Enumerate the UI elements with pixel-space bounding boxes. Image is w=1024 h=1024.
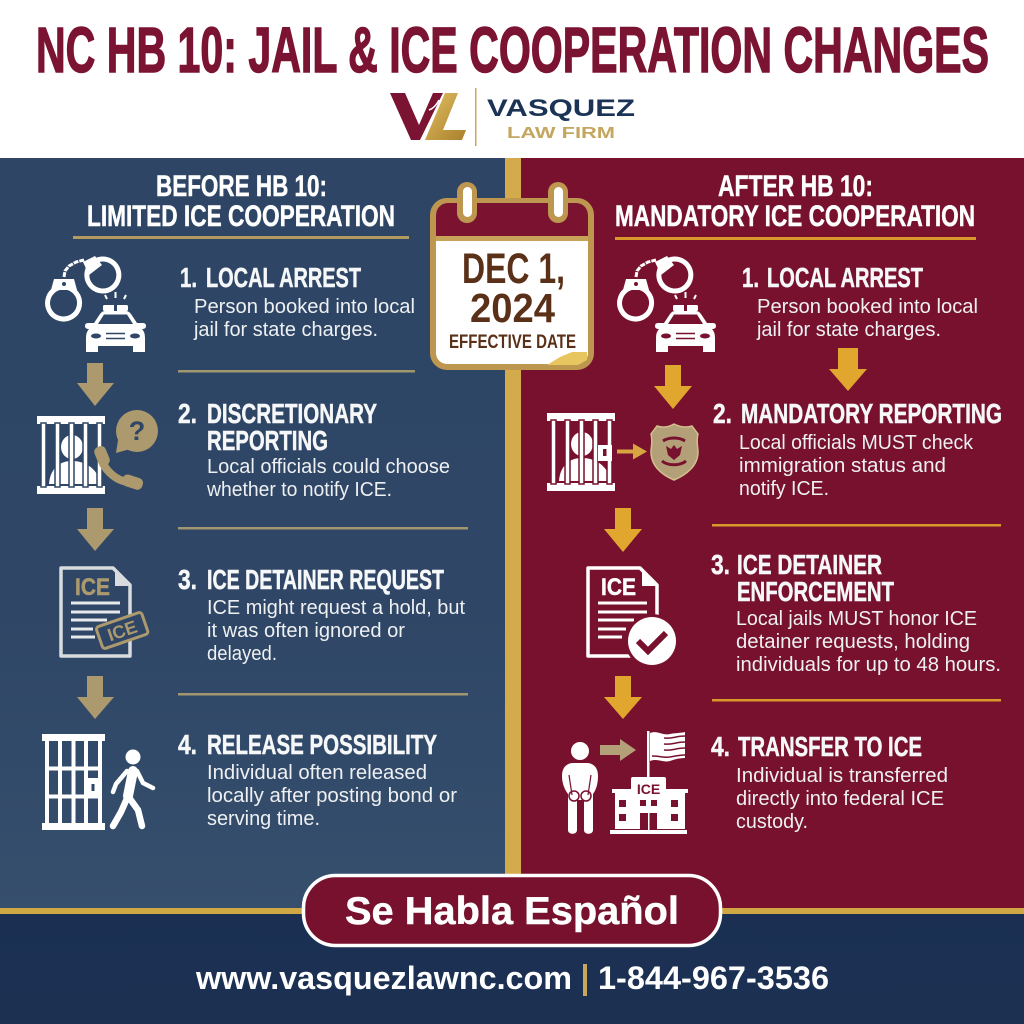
icon: jail and phone question (37, 410, 158, 494)
contact line: www.vasquezlawnc.com (195, 960, 572, 996)
step 3: ICE detainer request: ICE might request a hold, but (207, 597, 465, 619)
step 3: ICE detainer request (178, 564, 465, 665)
icon: ICE document with stamp: ICE (75, 574, 110, 601)
step 4: release possibility: RELEASE POSSIBILITY (207, 729, 437, 760)
before heading (73, 170, 409, 239)
step 2: discretionary reporting: REPORTING (207, 425, 328, 456)
step 1: local arrest: LOCAL ARREST (206, 262, 361, 293)
icon: ICE document with stamp: ICE (105, 617, 140, 645)
after heading: AFTER HB 10: (718, 170, 873, 203)
logo: Vasquez Law Firm (390, 88, 635, 146)
step 4: transfer to ICE: custody. (736, 811, 808, 833)
arrow (604, 508, 642, 552)
panel: before HB 10 (0, 158, 506, 910)
calendar: effective date: 2024 (470, 285, 555, 331)
step 2: mandatory reporting (713, 398, 1002, 500)
icon: jail door and walking person (42, 734, 153, 830)
icon: ICE document with stamp (61, 568, 149, 656)
step 2: discretionary reporting: 2. (178, 398, 197, 429)
center gold divider (505, 158, 521, 910)
icon: ICE document with check: ICE (601, 574, 636, 601)
step 1: local arrest: Person booked into local (757, 296, 978, 318)
step 4: transfer to ICE (711, 731, 948, 833)
arrow (604, 676, 642, 719)
step 1: local arrest: Person booked into local (194, 296, 415, 318)
icon: person transferred to ICE building: ICE (637, 781, 660, 797)
calendar: effective date: EFFECTIVE DATE (449, 331, 576, 353)
step 3: ICE detainer enforcement: ENFORCEMENT (737, 576, 894, 607)
step 4: release possibility: serving time. (207, 808, 320, 830)
icon: handcuffs and police car (48, 256, 146, 352)
contact line: 1-844-967-3536 (598, 960, 829, 996)
step 3: ICE detainer enforcement: Local jails MUST honor ICE (736, 608, 977, 630)
step 2: mandatory reporting: notify ICE. (739, 478, 829, 500)
step 3: ICE detainer request: ICE DETAINER REQUEST (207, 564, 444, 595)
step 1: local arrest: 1. (742, 262, 759, 293)
calendar: effective date: DEC 1, (462, 245, 565, 293)
step 2: discretionary reporting: whether to notify ICE. (206, 479, 392, 501)
step 1: local arrest: LOCAL ARREST (767, 262, 923, 293)
step 2: mandatory reporting: 2. (713, 398, 732, 429)
logo: Vasquez Law Firm: LAW FIRM (507, 125, 615, 142)
step 3: ICE detainer enforcement: individuals for up to 48 hours. (736, 654, 1001, 676)
icon: person transferred to ICE building (562, 731, 688, 834)
icon: handcuffs and police car (620, 256, 716, 352)
icon: ICE document with check (588, 568, 679, 668)
step 2: discretionary reporting (178, 398, 450, 501)
before heading: BEFORE HB 10: (156, 170, 327, 203)
badge: Se Habla Español: Se Habla Español (345, 890, 679, 933)
after heading (615, 170, 976, 240)
step 3: ICE detainer request: delayed. (207, 643, 277, 665)
badge: Se Habla Español (304, 876, 720, 946)
step 4: transfer to ICE: 4. (711, 731, 730, 762)
step 4: transfer to ICE: Individual is transferred (736, 765, 948, 787)
step 4: transfer to ICE: directly into federal ICE (736, 788, 944, 810)
step 1: local arrest: 1. (180, 262, 197, 293)
panel: after HB 10 (520, 158, 1024, 910)
step 3: ICE detainer enforcement: detainer requests, holding (736, 631, 970, 653)
arrow (77, 363, 114, 406)
before heading: LIMITED ICE COOPERATION (87, 200, 395, 233)
step 3: ICE detainer enforcement: ICE DETAINER (737, 549, 882, 580)
arrow (829, 348, 867, 391)
step 4: release possibility (178, 729, 457, 830)
step 2: mandatory reporting: immigration status and (739, 455, 946, 477)
calendar: effective date (433, 182, 591, 367)
icon: jail and phone question: ? (129, 416, 145, 446)
step 2: discretionary reporting: Local officials could choose (207, 456, 450, 478)
step 4: transfer to ICE: TRANSFER TO ICE (738, 731, 922, 762)
step 1: local arrest (180, 262, 415, 341)
step 3: ICE detainer enforcement: 3. (711, 549, 730, 580)
step 1: local arrest (742, 262, 978, 341)
step 3: ICE detainer request: 3. (178, 564, 197, 595)
step 3: ICE detainer request: it was often ignored or (207, 620, 405, 642)
step 4: release possibility: Individual often released (207, 762, 427, 784)
footer band (0, 908, 1024, 1024)
step 4: release possibility: locally after posting bond or (207, 785, 457, 807)
step 2: mandatory reporting: Local officials MUST check (739, 432, 974, 454)
step 1: local arrest: jail for state charges. (193, 319, 378, 341)
arrow (77, 676, 114, 719)
step 4: release possibility: 4. (178, 729, 197, 760)
arrow (77, 508, 114, 551)
contact line (195, 960, 829, 996)
icon: jail to badge (547, 413, 698, 491)
step 3: ICE detainer enforcement (711, 549, 1001, 676)
step 1: local arrest: jail for state charges. (756, 319, 941, 341)
step 2: discretionary reporting: DISCRETIONARY (207, 398, 377, 429)
arrow (654, 365, 692, 409)
logo: Vasquez Law Firm: VASQUEZ (487, 95, 635, 122)
